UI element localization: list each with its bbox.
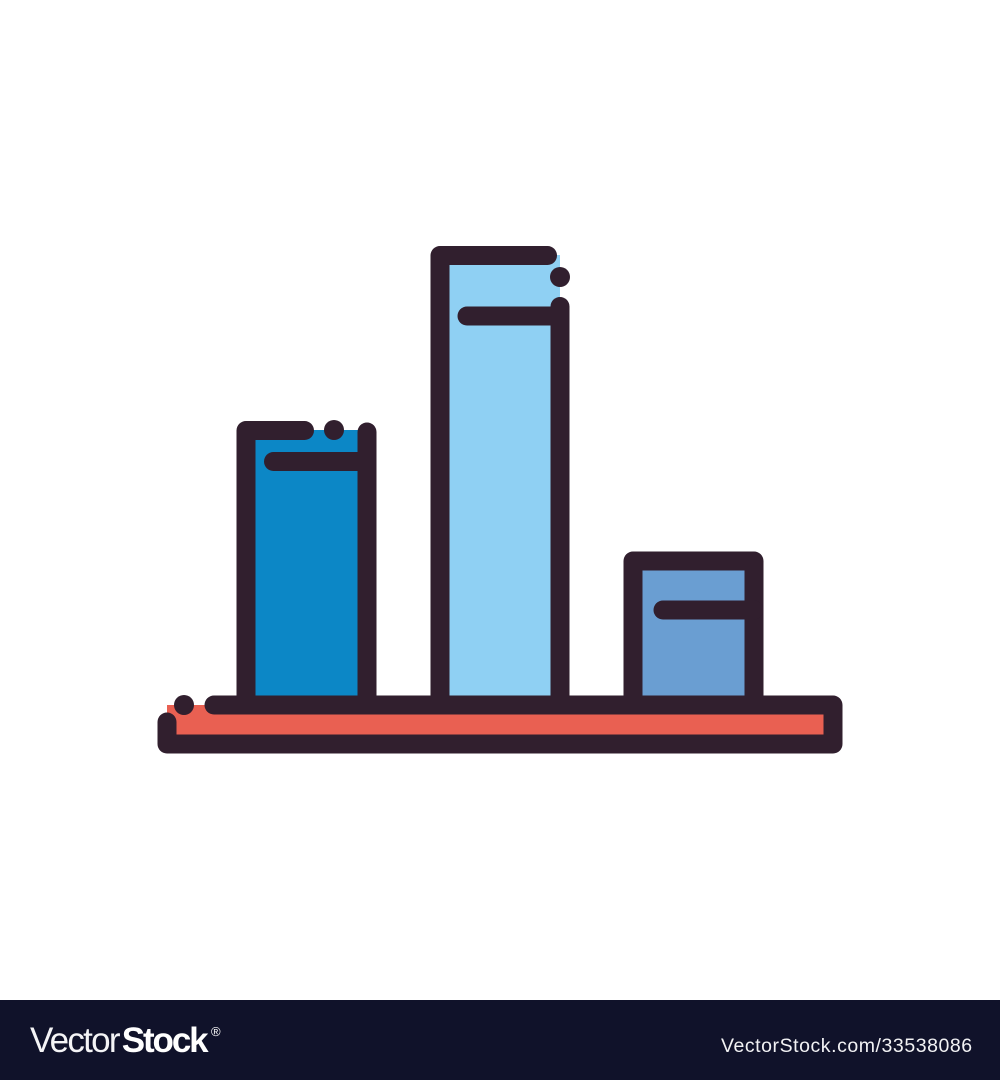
footer image url: VectorStock.com/33538086 [721,1035,973,1057]
footer logo text: ® [211,1024,221,1039]
icon: short medium blue bar [633,561,754,705]
icon: left dark blue bar [246,420,367,705]
footer logo text: VectorStock [30,1021,207,1060]
icon: red base shelf [167,695,834,744]
footer bar [0,1000,1000,1080]
icon: tall light blue bar [440,255,570,705]
